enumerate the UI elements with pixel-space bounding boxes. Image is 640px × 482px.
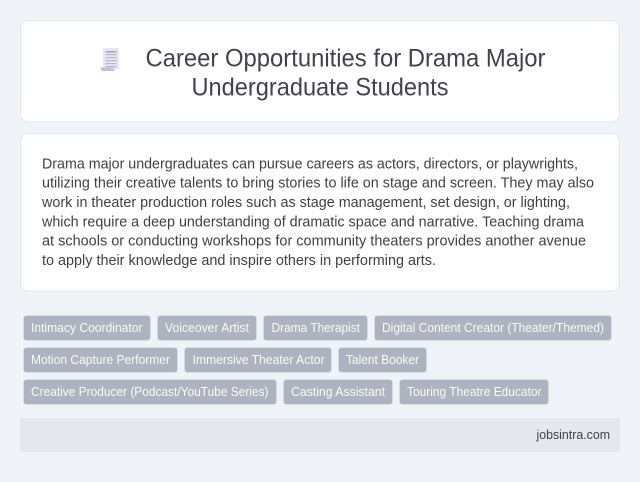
panel: header <box>20 20 620 122</box>
tag: Drama Therapist <box>264 316 368 340</box>
tag: Talent Booker <box>338 348 426 372</box>
panel: description <box>20 134 620 291</box>
tag: Drama Therapist: Drama Therapist <box>272 320 360 335</box>
tag: Digital Content Creator: Digital Content Creator (Theater/Themed) <box>382 320 604 335</box>
tag: Touring Theatre Educator <box>400 380 548 404</box>
title <box>146 45 546 102</box>
tag: Intimacy Coordinator: Intimacy Coordinator <box>31 320 143 335</box>
tag: Creative Producer <box>24 380 276 404</box>
tag list <box>24 316 612 404</box>
tag: Motion Capture Performer: Motion Capture Performer <box>31 352 171 367</box>
tag: Digital Content Creator <box>374 316 612 340</box>
tag: Casting Assistant <box>284 380 392 404</box>
footer: site name: jobsintra.com <box>536 428 610 442</box>
title: Career Opportunities for Drama Major <box>146 45 546 73</box>
tag: Touring Theatre Educator: Touring Theatre Educator <box>407 384 542 399</box>
tag: Intimacy Coordinator <box>24 316 150 340</box>
tag: Motion Capture Performer <box>24 348 178 372</box>
tag: Immersive Theater Actor <box>184 348 332 372</box>
text block: description: which require a deep understanding of dramatic space and narrative. Teaching drama <box>41 214 585 230</box>
text block: description: at schools or conducting workshops for community theaters provides another avenue <box>42 234 586 250</box>
title: Undergraduate Students <box>192 74 448 102</box>
text block: description <box>41 156 594 269</box>
tag: Talent Booker: Talent Booker <box>346 352 420 367</box>
tag: Casting Assistant: Casting Assistant <box>291 384 385 399</box>
tag: Voiceover Artist: Voiceover Artist <box>165 320 249 335</box>
tag: Creative Producer: Creative Producer (Podcast/YouTube Series) <box>31 384 268 399</box>
text block: description: utilizing their creative talents to bring stories to life on stage and screen. They may also <box>42 176 594 192</box>
icon: document scroll <box>100 48 119 71</box>
text block: description: work in theater production roles such as stage management, set design, or lighting, <box>41 195 570 211</box>
tag: Voiceover Artist <box>158 316 256 340</box>
tag: Immersive Theater Actor: Immersive Theater Actor <box>192 352 325 367</box>
text block: description: to apply their knowledge and inspire others in performing arts. <box>42 253 436 269</box>
text block: description: Drama major undergraduates can pursue careers as actors, directors, or playwrights, <box>42 156 578 172</box>
footer bar <box>20 418 620 452</box>
